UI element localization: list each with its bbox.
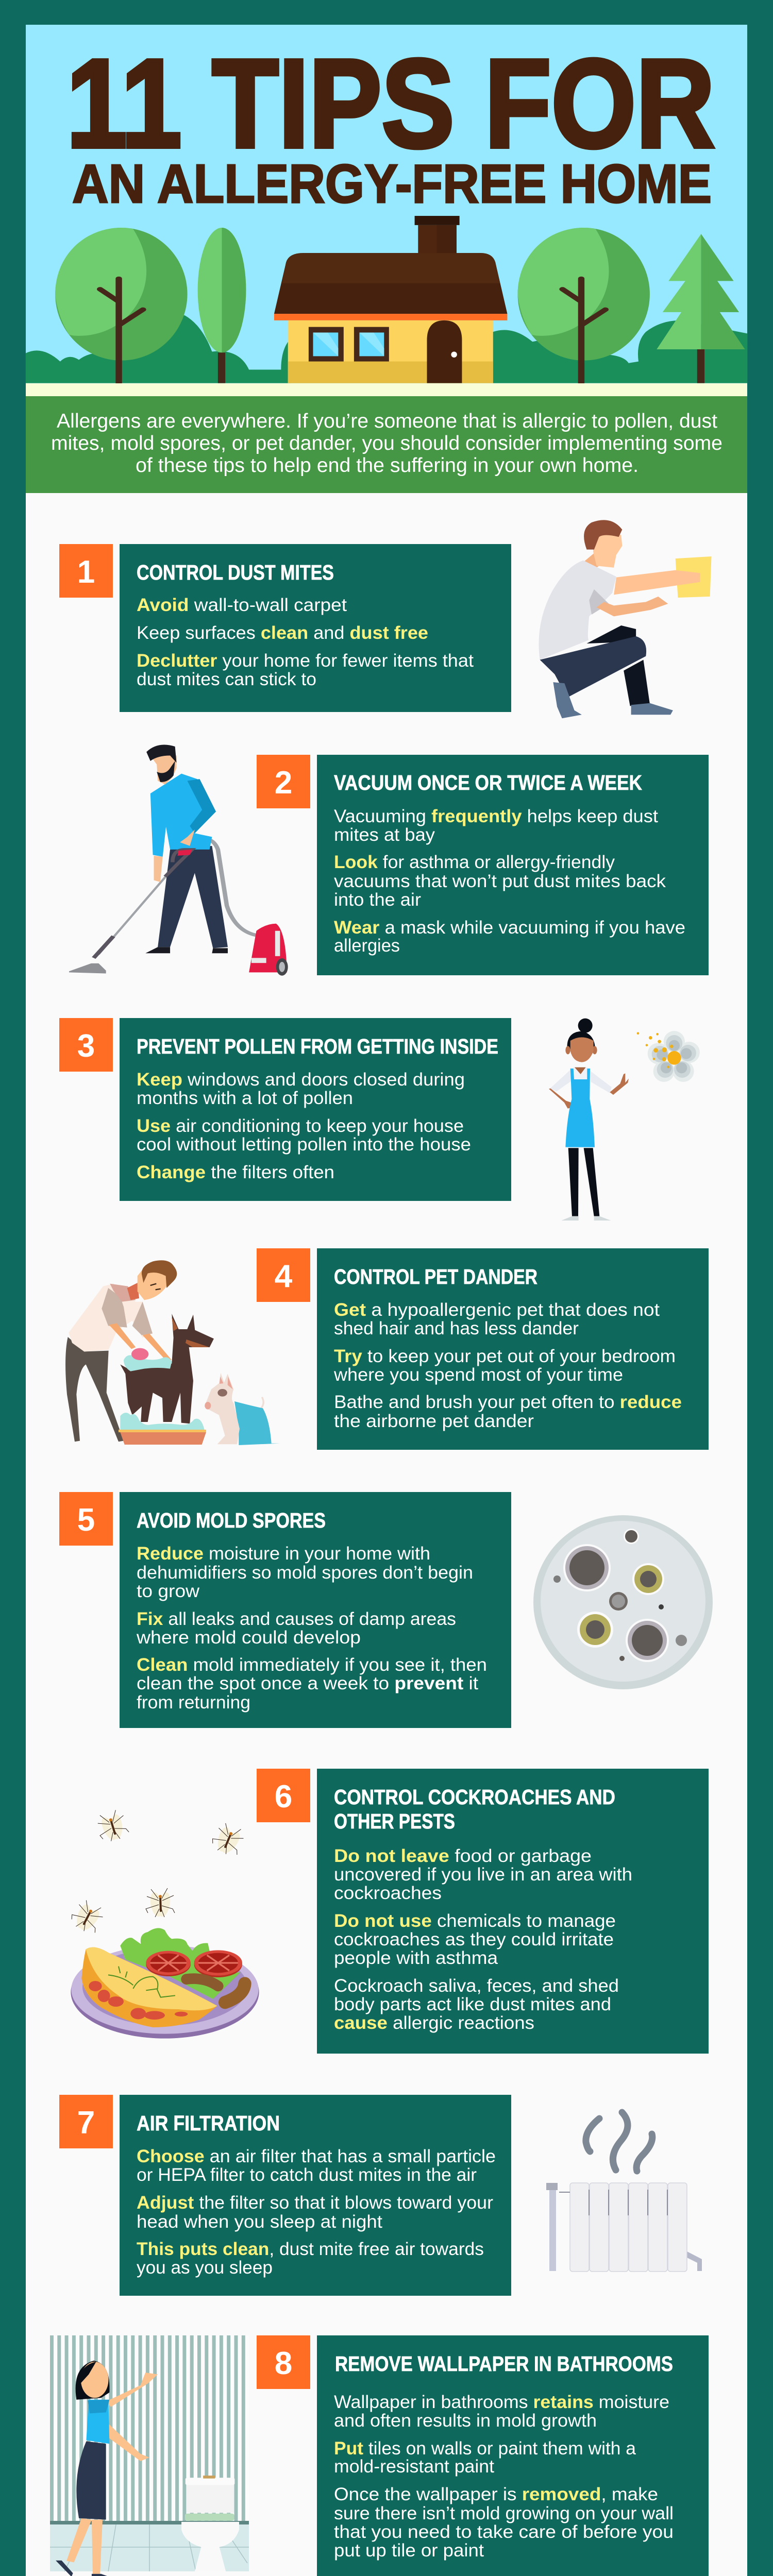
number badge bbox=[59, 2095, 113, 2148]
illustration: woman and pollen flower bbox=[549, 1019, 700, 1221]
text panel: the airborne pet dander bbox=[334, 1411, 534, 1431]
intro text: mites, mold spores, or pet dander, you should consider implementing some bbox=[51, 432, 722, 454]
text panel bbox=[317, 2335, 709, 2576]
text panel: PREVENT POLLEN FROM GETTING INSIDE bbox=[137, 1035, 498, 1058]
tree bbox=[55, 228, 188, 383]
illustration: man bathing dog bbox=[65, 1260, 280, 1445]
tip 1 bbox=[59, 520, 712, 718]
illustration: man wiping surface bbox=[539, 520, 712, 718]
text panel: Wear a mask while vacuuming if you have bbox=[334, 918, 685, 938]
tip 2 bbox=[69, 744, 709, 976]
text panel: clean the spot once a week to prevent it bbox=[137, 1673, 478, 1693]
text panel: mold-resistant paint bbox=[334, 2456, 494, 2477]
text panel: Declutter your home for fewer items that bbox=[137, 651, 474, 671]
text panel bbox=[120, 544, 511, 712]
ground strip bbox=[26, 383, 747, 396]
text panel: mites at bay bbox=[334, 825, 435, 845]
illustration: insects around food plate bbox=[68, 1808, 259, 2039]
text panel bbox=[120, 1018, 511, 1201]
illustration: man vacuuming bbox=[69, 744, 288, 976]
number badge: 7 bbox=[77, 2105, 95, 2141]
text panel: that you need to take care of before you bbox=[334, 2522, 674, 2542]
text panel: Do not use chemicals to manage bbox=[334, 1911, 616, 1931]
text panel: allergies bbox=[334, 936, 400, 956]
text panel bbox=[120, 1492, 511, 1728]
text panel: into the air bbox=[334, 890, 421, 910]
hero panel bbox=[26, 25, 747, 396]
text panel: Vacuuming frequently helps keep dust bbox=[334, 806, 658, 826]
tall tree bbox=[198, 228, 246, 383]
text panel: CONTROL DUST MITES bbox=[137, 561, 334, 584]
toilet bbox=[181, 2476, 239, 2571]
sky bbox=[26, 25, 747, 383]
illustration: bathroom with woman bbox=[50, 2335, 249, 2576]
number badge bbox=[59, 544, 113, 598]
text panel: dust mites can stick to bbox=[137, 669, 316, 689]
text panel: or HEPA filter to catch dust mites in the air bbox=[137, 2165, 477, 2185]
intro text: Allergens are everywhere. If you’re someone that is allergic to pollen, dust bbox=[57, 410, 717, 432]
text panel: cockroaches as they could irritate bbox=[334, 1929, 614, 1950]
tip 8 bbox=[50, 2335, 709, 2576]
number badge: 5 bbox=[77, 1502, 95, 1538]
text panel: where you spend most of your time bbox=[333, 1365, 623, 1385]
number badge: 8 bbox=[275, 2346, 292, 2381]
number badge: 6 bbox=[275, 1779, 292, 1815]
text panel: body parts act like dust mites and bbox=[334, 1994, 611, 2014]
text panel: VACUUM ONCE OR TWICE A WEEK bbox=[334, 771, 642, 794]
text panel: months with a lot of pollen bbox=[137, 1088, 353, 1108]
text panel: where mold could develop bbox=[136, 1628, 361, 1648]
text panel: shed hair and has less dander bbox=[334, 1318, 579, 1338]
text panel: Adjust the filter so that it blows toward your bbox=[137, 2193, 493, 2213]
text panel: Try to keep your pet out of your bedroom bbox=[334, 1346, 676, 1366]
tree right bbox=[518, 228, 650, 383]
text panel: dehumidifiers so mold spores don’t begin bbox=[137, 1563, 473, 1583]
steam bbox=[586, 2112, 652, 2171]
text panel bbox=[317, 1769, 709, 2054]
number badge: 1 bbox=[77, 554, 95, 590]
text panel: cool without letting pollen into the house bbox=[137, 1134, 471, 1155]
number badge bbox=[257, 1248, 310, 1302]
text panel: you as you sleep bbox=[137, 2258, 273, 2278]
flower bbox=[637, 1031, 700, 1082]
radiator bbox=[546, 2183, 702, 2272]
house bbox=[274, 216, 507, 383]
text panel: and often results in mold growth bbox=[334, 2411, 597, 2431]
text panel: REMOVE WALLPAPER IN BATHROOMS bbox=[335, 2352, 673, 2376]
number badge: 3 bbox=[77, 1028, 95, 1064]
insects bbox=[68, 1808, 247, 1937]
text panel bbox=[317, 755, 709, 975]
text panel: Once the wallpaper is removed, make bbox=[334, 2484, 658, 2504]
intro text bbox=[51, 410, 722, 477]
text panel: cause allergic reactions bbox=[334, 2013, 534, 2033]
number badge: 4 bbox=[275, 1259, 293, 1294]
intro text: of these tips to help end the suffering in your own home. bbox=[136, 454, 638, 477]
text panel: CONTROL PET DANDER bbox=[334, 1265, 537, 1289]
text panel: Keep windows and doors closed during bbox=[137, 1070, 465, 1090]
text panel: Get a hypoallergenic pet that does not bbox=[334, 1300, 660, 1320]
text panel: Clean mold immediately if you see it, then bbox=[137, 1655, 487, 1675]
text panel: sure there isn’t mold growing on your wall bbox=[334, 2503, 674, 2523]
text panel: Use air conditioning to keep your house bbox=[137, 1116, 464, 1136]
text panel: AVOID MOLD SPORES bbox=[137, 1509, 326, 1532]
text panel: Fix all leaks and causes of damp areas bbox=[137, 1609, 456, 1629]
tip 4 bbox=[65, 1248, 709, 1450]
text panel: to grow bbox=[137, 1581, 200, 1601]
text panel: Keep surfaces clean and dust free bbox=[137, 623, 428, 643]
tip 7 bbox=[59, 2095, 702, 2296]
text panel: Choose an air filter that has a small particle bbox=[137, 2146, 496, 2166]
number badge: 2 bbox=[275, 765, 292, 801]
text panel: put up tile or paint bbox=[334, 2540, 484, 2561]
text panel: from returning bbox=[137, 1692, 250, 1713]
woman bbox=[56, 2361, 158, 2576]
title: AN ALLERGY-FREE HOME bbox=[72, 154, 712, 214]
text panel: Change the filters often bbox=[137, 1162, 334, 1182]
tip 5 bbox=[59, 1492, 713, 1728]
number badge bbox=[59, 1018, 113, 1072]
tip 6 bbox=[68, 1769, 709, 2054]
text panel: Wallpaper in bathrooms retains moisture bbox=[334, 2392, 669, 2412]
text panel: vacuums that won’t put dust mites back bbox=[334, 871, 666, 891]
text panel: Look for asthma or allergy-friendly bbox=[334, 852, 615, 872]
number badge bbox=[257, 1769, 310, 1822]
number badge bbox=[257, 2335, 310, 2389]
number badge bbox=[59, 1492, 113, 1546]
text panel: OTHER PESTS bbox=[334, 1809, 455, 1833]
text panel: cockroaches bbox=[334, 1883, 442, 1903]
text panel: This puts clean, dust mite free air towards bbox=[137, 2239, 484, 2259]
text panel: Do not leave food or garbage bbox=[334, 1846, 592, 1866]
text panel: AIR FILTRATION bbox=[137, 2111, 280, 2135]
text panel bbox=[120, 2095, 511, 2296]
intro panel bbox=[26, 396, 747, 493]
text panel: head when you sleep at night bbox=[137, 2212, 382, 2232]
text panel bbox=[317, 1248, 709, 1450]
text panel: Bathe and brush your pet often to reduce bbox=[334, 1392, 682, 1412]
number badge bbox=[257, 755, 310, 808]
illustration: radiator with steam bbox=[546, 2112, 702, 2272]
text panel: uncovered if you live in an area with bbox=[334, 1865, 632, 1885]
text panel: Cockroach saliva, feces, and shed bbox=[334, 1976, 619, 1996]
pine tree bbox=[657, 234, 745, 383]
illustration: house and trees bbox=[26, 216, 747, 383]
text panel: people with asthma bbox=[334, 1948, 498, 1968]
text panel: Put tiles on walls or paint them with a bbox=[334, 2438, 636, 2459]
plate of food bbox=[71, 1928, 259, 2039]
text panel: CONTROL COCKROACHES AND bbox=[334, 1785, 615, 1809]
tip 3 bbox=[59, 1018, 700, 1221]
text panel: Reduce moisture in your home with bbox=[137, 1544, 430, 1564]
text panel: Avoid wall-to-wall carpet bbox=[137, 595, 347, 615]
illustration: petri dish with mold bbox=[533, 1515, 713, 1689]
